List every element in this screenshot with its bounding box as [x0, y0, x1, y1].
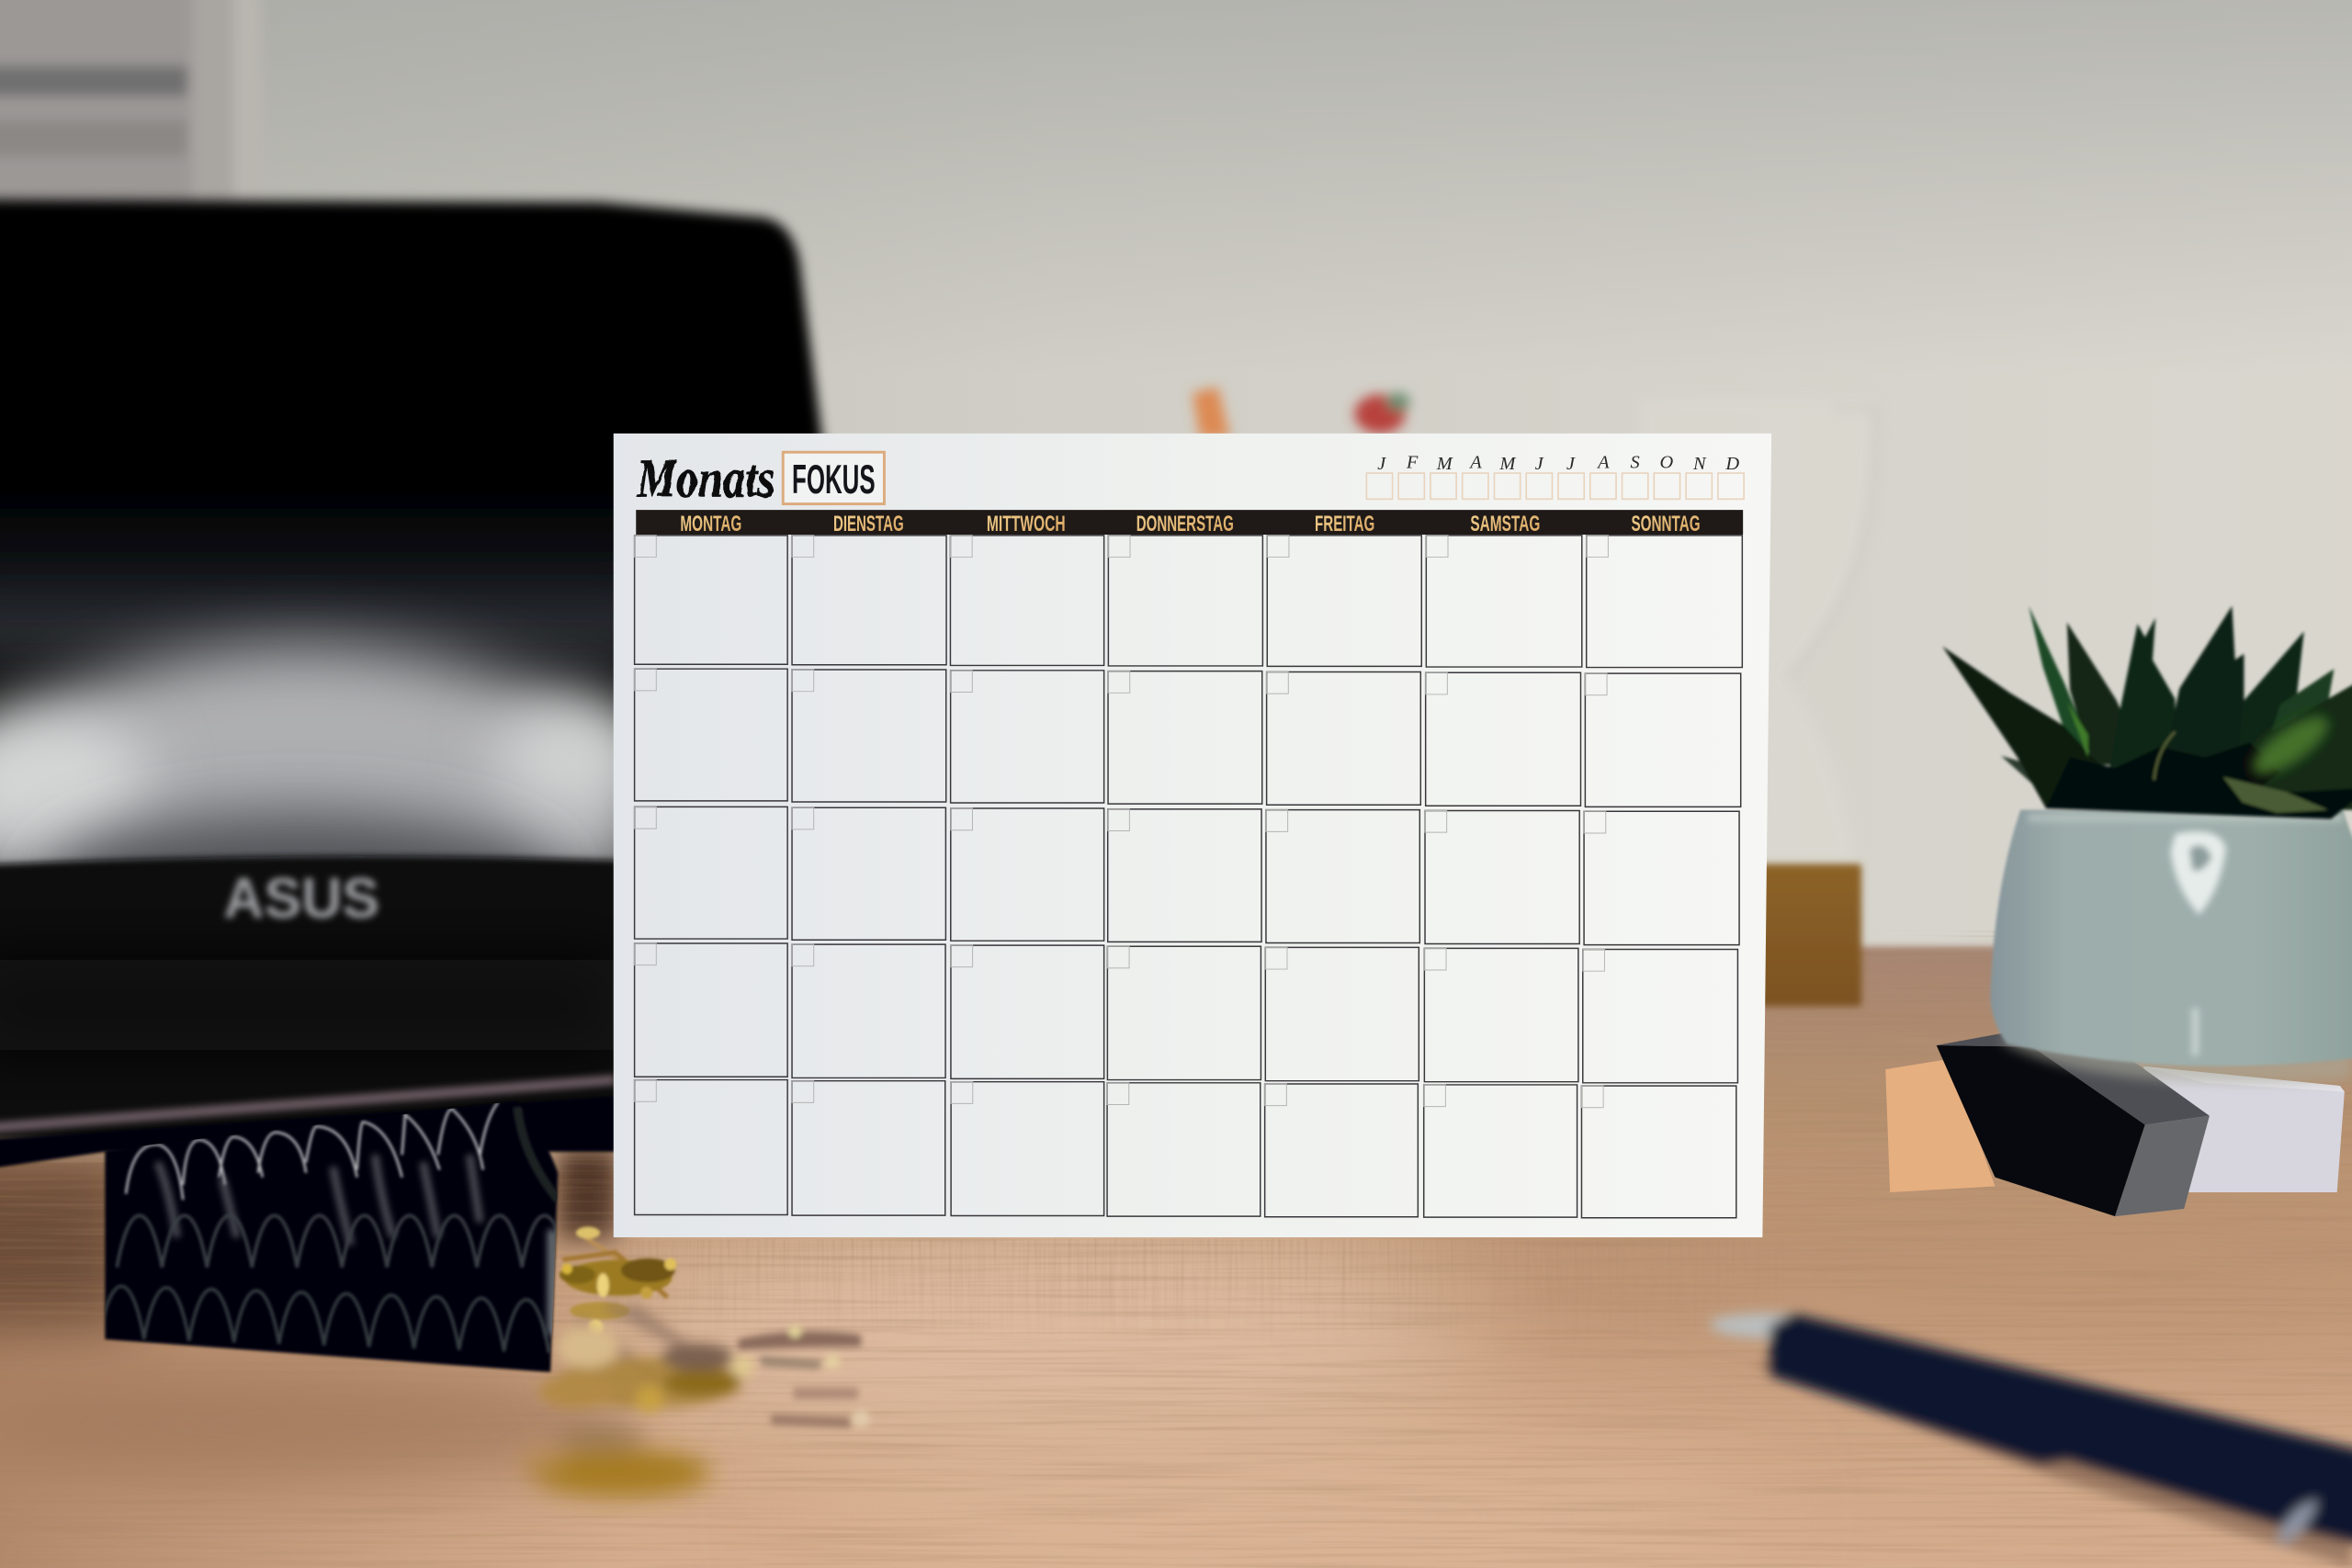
blurred clip cluster: [538, 1304, 753, 1413]
month letters: A: [1468, 452, 1482, 472]
window frame at top left: [0, 0, 261, 225]
week row 2: [635, 669, 1741, 807]
pen body: [1770, 1314, 2352, 1560]
pot rim light: [2028, 815, 2343, 822]
title: Monats: Monats: [636, 448, 775, 508]
calendar grid: [635, 536, 1742, 1218]
month letters: F: [1406, 452, 1419, 472]
weekday header bar: [636, 510, 1743, 536]
weekday header bar: MONTAG: [680, 512, 741, 536]
month letters: J: [1566, 454, 1576, 474]
paperweight side face: [2115, 1116, 2210, 1216]
month letters: J: [1377, 454, 1386, 474]
month letters: N: [1692, 454, 1707, 474]
pot highlight: [2170, 831, 2226, 915]
wooden table: [0, 946, 2352, 1568]
month letters: A: [1596, 452, 1610, 472]
weekday header bar: SONNTAG: [1632, 512, 1701, 536]
ASUS logo: ASUS: [223, 867, 379, 931]
month letters: D: [1724, 454, 1739, 474]
calendar sheet: [614, 434, 1771, 1237]
week row 3: [635, 807, 1739, 945]
weekday header bar: MITTWOCH: [987, 512, 1066, 536]
organiser top scallops: [126, 1102, 498, 1200]
weekday header bar: FREITAG: [1315, 512, 1374, 536]
plant pot: [1990, 810, 2352, 1083]
organiser highlights: [157, 1155, 480, 1245]
month letters: O: [1660, 452, 1674, 472]
hourglass behind calendar: [1639, 399, 1876, 863]
out-of-focus clip cluster: [516, 1422, 711, 1496]
pencil cup items: [1193, 387, 1410, 438]
stack of white sticky notes: [2143, 1066, 2345, 1192]
laptop edge: [0, 1080, 615, 1129]
loose clips: [738, 1325, 870, 1427]
weekday header bar: DONNERSTAG: [1136, 512, 1234, 536]
laptop base: [0, 856, 630, 1140]
amber hourglass base block: [1755, 863, 1861, 1007]
pen shadow: [1755, 1358, 2352, 1567]
sharp clip cluster: [560, 1227, 676, 1335]
gold paper clips: [516, 1227, 870, 1496]
laptop: [0, 199, 823, 1176]
week row 1: [635, 536, 1742, 668]
black honeycomb desk organiser: [99, 1100, 567, 1389]
organiser scale rows: [117, 1215, 567, 1268]
succulent plant: [1942, 606, 2352, 818]
dark hexagonal paperweight: [1937, 1032, 2210, 1216]
month letters: M: [1498, 454, 1516, 474]
pen in the foreground: [1712, 1313, 2352, 1567]
pen clip tip: [1712, 1313, 1792, 1338]
month tracker: [1366, 452, 1744, 499]
month checkboxes: [1366, 473, 1744, 499]
background wall: [0, 0, 2352, 1050]
week row 5: [635, 1080, 1736, 1218]
wood block: [1885, 1059, 1995, 1192]
month letters: S: [1630, 452, 1640, 472]
month letters: [1377, 452, 1739, 474]
title box: FOKUS: [783, 452, 884, 504]
weekday header bar: DIENSTAG: [833, 512, 904, 536]
weekday header bar: SAMSTAG: [1470, 512, 1540, 536]
month letters: M: [1436, 454, 1453, 474]
laptop screen: [0, 199, 823, 960]
paperweight dark face: [1937, 1045, 2145, 1216]
paperweight top face: [1937, 1032, 2210, 1125]
paper: [614, 434, 1771, 1237]
month letters: J: [1535, 454, 1544, 474]
title box: FOKUS: FOKUS: [792, 456, 876, 502]
week row 4: [635, 943, 1737, 1083]
